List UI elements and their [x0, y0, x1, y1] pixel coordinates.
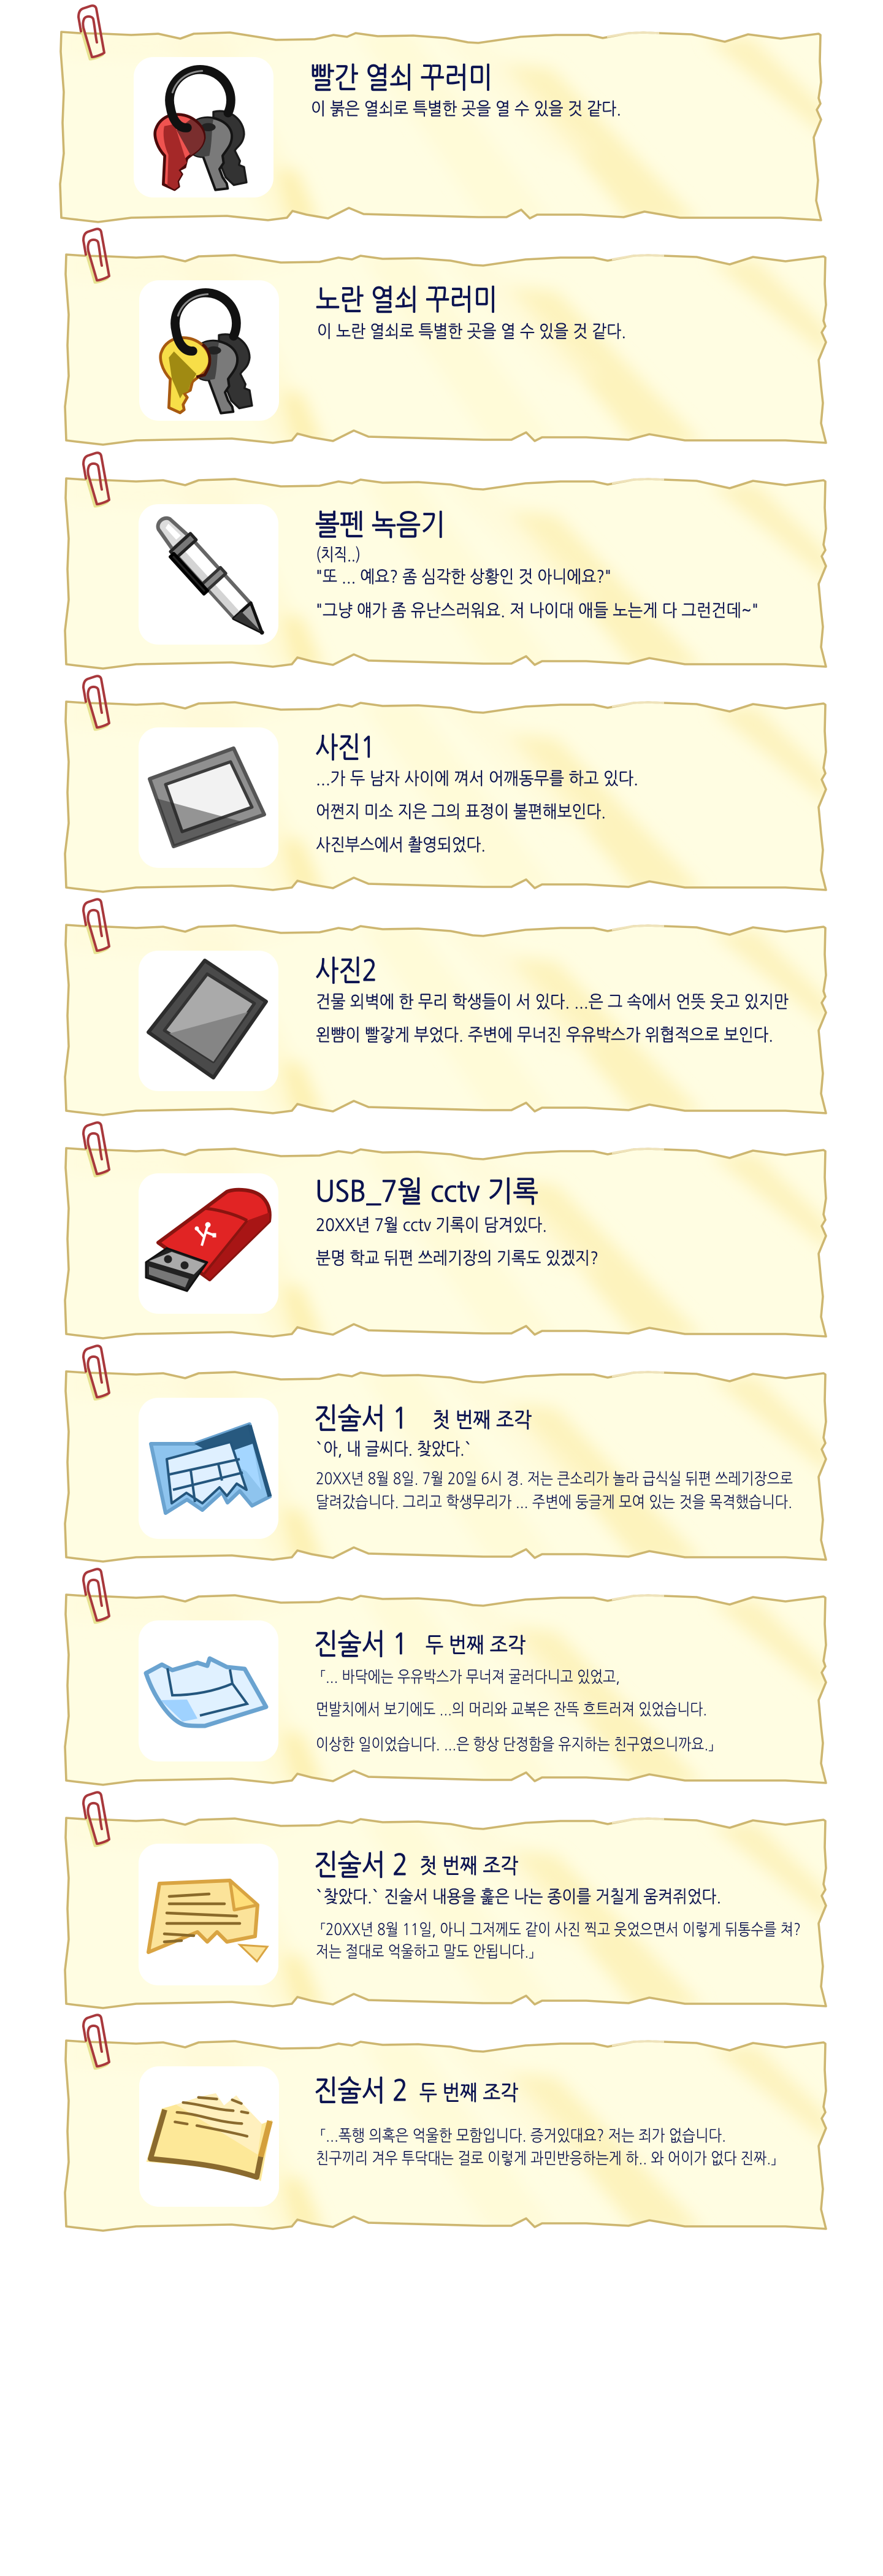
title: 진술서 1	[314, 1630, 408, 1658]
line 1: 20XX년 7월 cctv 기록이 담겨있다.	[316, 1216, 547, 1234]
panel: 진술서 2 두 번째 조각	[63, 2015, 830, 2234]
paper sheet	[63, 1815, 830, 2011]
line 2: 달려갔습니다. 그리고 학생무리가 ... 주변에 둥글게 모여 있는 것을 목격했습니다.	[316, 1494, 792, 1510]
panel: 볼펜 녹음기	[63, 453, 830, 672]
line 2: 저는 절대로 억울하고 말도 안됩니다.」	[316, 1944, 533, 1960]
panel: 진술서 2 첫 번째 조각	[63, 1792, 830, 2011]
panel: USB	[63, 1122, 830, 1341]
quote: `아, 내 글씨다. 찾았다.`	[316, 1439, 472, 1459]
line 2: 분명 학교 뒤편 쓰레기장의 기록도 있겠지?	[316, 1249, 598, 1267]
paperclip	[78, 6, 104, 59]
line 3: 이상한 일이었습니다. ...은 항상 단정함을 유지하는 친구였으니까요.」	[316, 1736, 713, 1752]
paperclip	[83, 1346, 109, 1399]
icon card: photo 1	[139, 727, 278, 868]
paper sheet	[63, 2037, 830, 2234]
icon card: torn blue sheet top	[139, 1398, 278, 1539]
title: 진술서 2	[314, 2076, 408, 2105]
paperclip	[83, 1569, 109, 1622]
icon card: torn gold sheet bottom	[139, 2066, 279, 2207]
line 2: 친구끼리 겨우 투닥대는 걸로 이렇게 과민반응하는게 하.. 와 어이가 없다 진짜.」	[316, 2150, 776, 2166]
subtitle: 두 번째 조각	[426, 1635, 526, 1655]
paper sheet	[63, 699, 830, 895]
icon card: photo 2	[139, 951, 278, 1091]
panel: 빨간 열쇠 꾸러미	[58, 6, 825, 225]
subtitle: 두 번째 조각	[419, 2082, 518, 2103]
quote line 1: "또 ... 예요? 좀 심각한 상황인 것 아니에요?"	[316, 568, 611, 586]
noise line: (치직..)	[316, 546, 361, 564]
paperclip	[83, 229, 109, 282]
panel: 사진2	[63, 899, 830, 1118]
icon card: pen recorder	[139, 504, 278, 646]
icon card: torn blue sheet bottom	[139, 1620, 278, 1761]
icon card: red USB stick	[139, 1173, 278, 1314]
paperclip	[83, 2015, 109, 2068]
paper sheet	[63, 251, 830, 448]
panel: 노란 열쇠 꾸러미	[63, 229, 830, 448]
paper sheet	[63, 922, 830, 1118]
description: 이 노란 열쇠로 특별한 곳을 열 수 있을 것 같다.	[317, 323, 626, 340]
paper sheet	[63, 1368, 830, 1565]
icon: USB trident	[195, 1222, 216, 1246]
quote: `찾았다.` 진술서 내용을 훑은 나는 종이를 거칠게 움켜쥐었다.	[316, 1887, 721, 1907]
icon card: yellow key ring	[139, 280, 279, 421]
panel: 사진1	[63, 676, 830, 895]
paperclip	[83, 1122, 109, 1176]
title: 사진1	[315, 733, 375, 762]
line 2: 왼뺨이 빨갛게 부었다. 주변에 무너진 우유박스가 위협적으로 보인다.	[316, 1026, 773, 1044]
description: 이 붉은 열쇠로 특별한 곳을 열 수 있을 것 같다.	[311, 100, 621, 118]
line 2: 먼발치에서 보기에도 ...의 머리와 교복은 잔뜩 흐트러져 있었습니다.	[316, 1701, 707, 1717]
paper sheet	[63, 1145, 830, 1341]
panel: 진술서 1 첫 번째 조각	[63, 1346, 830, 1565]
panel: 진술서 1 두 번째 조각	[63, 1569, 830, 1788]
icon card: red key ring	[134, 57, 273, 197]
paper sheet	[63, 1592, 830, 1788]
title: 사진2	[315, 956, 377, 985]
paperclip	[83, 676, 109, 729]
line 3: 사진부스에서 촬영되었다.	[316, 836, 486, 854]
paperclip	[83, 453, 109, 506]
quote line 2: "그냥 얘가 좀 유난스러워요. 저 나이대 애들 노는게 다 그런건데~"	[316, 602, 759, 619]
icon card: torn gold sheet top	[139, 1844, 278, 1985]
line 1: ...가 두 남자 사이에 껴서 어깨동무를 하고 있다.	[316, 770, 638, 788]
paperclip	[83, 1792, 109, 1846]
line 1: 「...폭행 의혹은 억울한 모함입니다. 증거있대요? 저는 죄가 없습니다.	[321, 2128, 726, 2144]
line 1: 건물 외벽에 한 무리 학생들이 서 있다. ...은 그 속에서 언뜻 웃고 있지만	[316, 993, 789, 1011]
line 1: 「... 바닥에는 우유박스가 무너져 굴러다니고 있었고,	[321, 1669, 620, 1685]
title: 노란 열쇠 꾸러미	[316, 285, 497, 314]
line 1: 20XX년 8월 8일. 7월 20일 6시 경. 저는 큰소리가 놀라 급식실 뒤편 쓰레기장으로	[316, 1471, 793, 1487]
title: 진술서 1	[314, 1404, 408, 1433]
title: 빨간 열쇠 꾸러미	[310, 63, 492, 92]
line 1: 「20XX년 8월 11일, 아니 그저께도 같이 사진 찍고 웃었으면서 이렇게 뒤통수를 쳐?	[321, 1922, 801, 1938]
paper sheet	[63, 475, 830, 672]
subtitle: 첫 번째 조각	[432, 1409, 532, 1430]
line 2: 어쩐지 미소 지은 그의 표정이 불편해보인다.	[316, 803, 606, 821]
subtitle: 첫 번째 조각	[419, 1855, 518, 1876]
title: 진술서 2	[314, 1850, 408, 1879]
paperclip	[83, 899, 109, 953]
title: USB_7월 cctv 기록	[315, 1177, 538, 1206]
title: 볼펜 녹음기	[315, 510, 445, 539]
paper sheet	[58, 29, 825, 225]
